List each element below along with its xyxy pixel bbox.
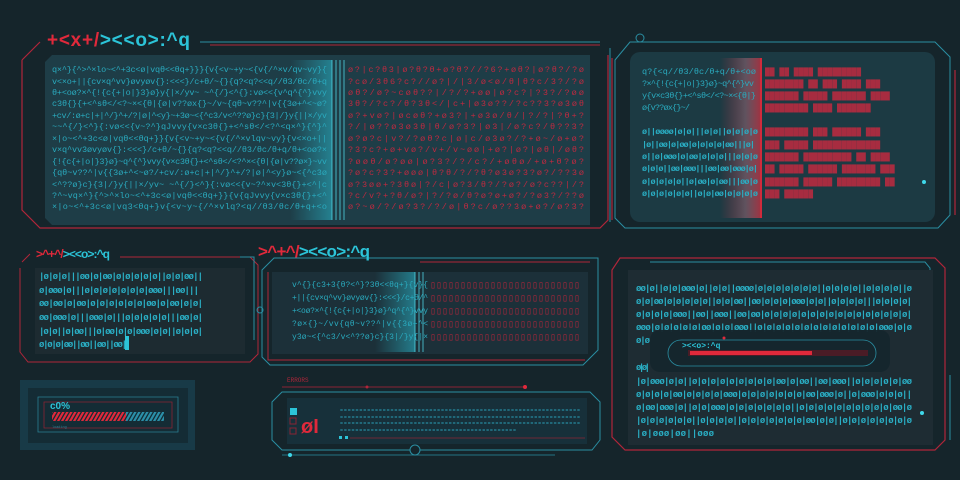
text block: binary: ø|ø|ø|ø|ø||ø|øø|ø|øø|||øø|ø bbox=[642, 177, 758, 187]
cursor bbox=[125, 336, 129, 350]
progress bar bbox=[52, 412, 164, 421]
text block: cyan glyphs: c3θ{}{+<^sθ</<?~×<{θ|{ø|v??øx{}~/v~{qθ~v??^|v{{3ø+^<~ø? bbox=[52, 99, 327, 109]
text block: red redacted: █████████ ███ ██████ ███ bbox=[765, 127, 880, 137]
text block: binary lower: |ø|øøø|øø||øøø bbox=[636, 429, 714, 439]
text block: red glyphs: ?øøθ/ø?øø|ø?3?/?/c?/+øθø/+ø+θ?ø? bbox=[348, 157, 584, 167]
text block: binary: |ø||øø|ø|øø|ø|ø|ø|ø|øø|||ø| bbox=[642, 140, 755, 150]
text block: binary upper: øøø|ø|ø|ø|ø|ø|øø|ø|ø|øøø||ø|ø|ø|ø|ø|ø|ø|ø|ø|ø|ø|ø|ø|øøø|ø|ø bbox=[636, 323, 912, 333]
text block: red glyphs bbox=[348, 65, 584, 212]
text block: binary bbox=[39, 272, 203, 350]
popup: progress overlay: ><<o>:^q bbox=[682, 342, 721, 351]
text block: cyan source: ø{v??øx{}~/ bbox=[642, 103, 690, 113]
text block: cyan glyphs: ~~^{/}<^}{:vø<<{v~?^}qJvvy{v×c3θ{}+<^sθ</<?^<q×^}{^}^ bbox=[52, 122, 327, 132]
data lines: ============================================================== bbox=[340, 415, 580, 421]
text block: red glyphs: ø?~ø/?/ø?3?/?/ø|θ?c/ø??3ø+ø?/ø?3? bbox=[348, 202, 584, 212]
text block: cyan glyphs: v<×o+||{cv×q^vv}øvyøv{}:<<<}/c+θ/~{}{q?<q?<<q//θ3/θc/θ+q bbox=[52, 77, 327, 87]
text block: binary: ø||øøøø|ø|ø|||ø|ø||ø|ø|ø|ø bbox=[642, 127, 758, 137]
text block: red glyphs: øθ?/ø?~cøθ??|/?/?+øø|ø?c?|?3?/?øø bbox=[348, 88, 584, 98]
text block: red redacted: ███████ █████ ███████ ████ bbox=[765, 91, 890, 101]
text block: binary: ø|ø|ø||øø|øøø|||øø|øø|øøø|ø| bbox=[642, 164, 758, 174]
text block: cyan glyphs: {!{c{+|o|}3}ø}~q^{^}vvy{v×c3θ{}+<^sθ</<?^×<{θ|{ø|v??ø×}~vv bbox=[52, 157, 327, 167]
text block: cyan glyphs: ×|o~<^+3c<ø|vq3<θq+}v{<v~y~{/^×vlq?<q//θ3/θc/θ+q+<o bbox=[52, 202, 327, 212]
text block: cyan glyphs: θ+<oø?×^{!{c{+|o|}3}ø}y{|×/yv~ ~^{/}<^{}:vø<<{v^q^{^}vvy bbox=[52, 88, 327, 98]
title: text decoding: +<x+/><<o>:^q bbox=[47, 30, 190, 51]
text block: binary upper bbox=[636, 284, 912, 373]
text block: cyan glyphs: +cv/:ø+c|+|^/}^+/?|ø|^<y}~+3ø~<{^c3/v<^??ø}c}{3|/}y{||×/yv bbox=[52, 111, 327, 121]
text block: red redacted: ███████ ██████████ ██ ████ bbox=[765, 152, 890, 162]
text block: cyan source bbox=[642, 67, 756, 113]
text block: binary lower: ø|ø|ø|ø|øø|ø|ø|ø|ø|øøø|ø|ø|ø|ø|ø|ø|ø|øø|øøø|ø||ø|øøø|ø|ø|ø|| bbox=[636, 390, 912, 400]
text block: cyan glyphs: y3ø~<{^c3/v<^??ø}c}{3|/}y{|× bbox=[292, 333, 428, 342]
title: centre decoding: >^+^/><<o>:^q bbox=[258, 242, 370, 261]
label: errors: ERRORS bbox=[287, 377, 309, 384]
panel: centre decoding bbox=[258, 242, 598, 365]
text block: binary lower: ø|øø|øøø|ø||ø|ø|øøø|ø|ø|ø|ø|ø|ø|ø||ø|ø|ø|ø|ø|ø|ø|ø|ø|ø|øø|ø bbox=[636, 403, 912, 413]
text block: cyan glyphs bbox=[292, 281, 428, 342]
text block: red glyphs: ?ø?c?3?+øøø|θ?θ/?/?θ?ø3ø?3?ø?/??3ø bbox=[348, 168, 584, 178]
text block: binary: |ø|ø|ø|||øø|ø|øø|ø|ø|ø|ø|ø||ø|ø|øø|| bbox=[39, 272, 203, 282]
panel: errors bbox=[272, 377, 600, 457]
text block: binary: |ø|ø||ø|øø|||ø|øø|ø|ø|øøø|ø|ø||ø|ø|ø| bbox=[39, 327, 203, 337]
text block: binary upper: ø|ø| bbox=[636, 363, 650, 373]
text block: red redacted: ███████ ██████ █████████ ██ bbox=[765, 177, 895, 187]
red placeholder boxes: ▯▯▯▯▯▯▯▯▯▯▯▯▯▯▯▯▯▯▯▯▯▯▯▯▯ bbox=[430, 294, 580, 305]
text block: binary: ø||ø|øøø|ø|øø|ø|ø|ø|||ø|ø|ø bbox=[642, 152, 758, 162]
text block: red glyphs: ø?3øø+?3θø|?/c|ø?3/θ?/?ø?/ø?c??|/? bbox=[348, 180, 584, 190]
text block: red redacted: ██ ██ ████ █████████ bbox=[765, 67, 861, 77]
text block: cyan source: q?{<q//θ3/θc/θ+q/θ+<oø bbox=[642, 67, 756, 77]
text block: red glyphs: ø?+vø?|øcøθ?+ø3?|+ø3ø/θ/|?/?|?θ+? bbox=[348, 111, 584, 121]
text block: cyan glyphs: +||{cv×q^vv}øvyøv{}:<<<}/c+θ/^ bbox=[292, 294, 428, 303]
text block: red glyphs: ?3?c?+ø+vø?/v+/v~øø|+ø?|ø?|øθ|/øθ? bbox=[348, 145, 584, 155]
panel: bottom-right binary bbox=[612, 258, 950, 450]
panel: progress: loading bbox=[52, 425, 67, 430]
text block: red glyphs: ?cø/3θ6?c?//ø?|/|3/ø<ø/θ|θ?c/3?/?ø bbox=[348, 77, 584, 87]
text block: red glyphs: ø?ø?c|v?/?øθ?c|ø|c/ø3ø?/?+ø~/ø+ø? bbox=[348, 134, 584, 144]
text block: binary: ø|ø|ø|øø||øø||øø||øø| bbox=[39, 340, 127, 350]
text block: cyan glyphs: q×^}{^>^×lo~<^+3c<ø|vqθ<<θq+}}}{v{<v~+y~<{v{/^×v/qv~vy}{ bbox=[52, 65, 327, 75]
text block: red redacted: ███ ██████ bbox=[765, 189, 813, 199]
text block: binary lower: |ø|ø|ø|ø|ø|ø||ø|ø|ø|ø||ø|ø|ø|ø|ø|ø|ø|øø|ø|ø||ø|ø|ø|ø|ø|ø|ø|ø bbox=[636, 416, 912, 426]
data lines: ============================================================== bbox=[340, 421, 580, 427]
text block: binary: ø|øøø|ø|||ø|ø|ø|ø|ø|ø|ø|øøø|||øø||| bbox=[39, 286, 199, 296]
title: small decoding: >^+^/><<o>:^q bbox=[36, 247, 110, 261]
text block: cyan glyphs: <^??ø}c}{3|/}y{||×/yv~ ~^{/}<^}{:vø<<{v~?^×v<3θ{}+<^|c bbox=[52, 180, 327, 190]
icon: error indicator: øI bbox=[301, 416, 319, 438]
red placeholder boxes: ▯▯▯▯▯▯▯▯▯▯▯▯▯▯▯▯▯▯▯▯▯▯▯▯▯ bbox=[430, 307, 580, 318]
text block: binary upper: ø|ø|øø|ø|ø|ø|ø|ø||ø|ø|øø||øø|ø|ø|ø|øøø|ø|ø||ø|ø|ø|ø|||ø|ø|ø|ø| bbox=[636, 297, 912, 307]
text block: cyan glyphs: {qθ~v??^|v{{3ø+^<~ø?/+cv/:ø+c|+|^/}^+/?|ø|^<y}ø~<{^c3ø bbox=[52, 168, 327, 178]
data lines bbox=[340, 408, 580, 434]
text block: binary: øø|øø|ø|øø|ø|ø|ø|ø|ø|ø|øø|ø|øø|ø|ø| bbox=[39, 299, 203, 309]
text block: red redacted: ██ █████ ██████ ███████ ███ bbox=[765, 164, 895, 174]
text block: cyan glyphs: v×q^vv3øvyøv{}:<<<}/c+θ/~{}{q?<q?<<q//θ3/θc/θ+q/θ+<oø?× bbox=[52, 145, 327, 155]
red placeholder boxes: ▯▯▯▯▯▯▯▯▯▯▯▯▯▯▯▯▯▯▯▯▯▯▯▯▯ bbox=[430, 281, 580, 292]
label: percent: c0% bbox=[50, 401, 70, 412]
text block: binary: øø|øøø|ø|||øøø|ø|||ø|ø|ø|ø|ø|||øø|ø| bbox=[39, 313, 203, 323]
text block: red redacted bbox=[765, 67, 895, 199]
text block: binary upper: øø|ø||ø|ø|øøø|ø||ø|ø||øøøø|ø|ø|ø|ø|ø|ø|ø||ø|ø|ø|ø||ø|ø|ø|ø||ø bbox=[636, 284, 912, 294]
text block: cyan glyphs: v^{}{c3+3{θ?<^}?3θ<<θq+}{v}{ bbox=[292, 281, 428, 290]
text block: binary lower bbox=[636, 377, 912, 439]
data lines: ============================================== bbox=[340, 428, 516, 434]
text block: binary upper: ø|ø|ø|ø|øøø||øø||øøø||øø|øø|ø|ø|ø|ø|ø|ø|ø|ø|ø|ø|ø|ø|ø|ø|ø|ø| bbox=[636, 310, 912, 320]
text block: cyan glyphs: ?^~vq×^}{^>^×lo~<^+3c<ø|vqθ<<θq+}}{v{qJvvy{v×c3θ{}+<^ bbox=[52, 191, 327, 201]
text block: binary bbox=[642, 127, 758, 199]
text block: cyan source: ?×^{!{c{+|o|}3}ø}~q^{^}vv bbox=[642, 79, 754, 89]
text block: cyan glyphs: ×|o~<^+3c<ø|vqθ<<θq+}}{v{<v~+y~<{v{/^×vlqv~vy}{v<×o+|| bbox=[52, 134, 327, 144]
text block: red redacted: █████████ ████ ███████ bbox=[765, 103, 871, 113]
red placeholder boxes: ▯▯▯▯▯▯▯▯▯▯▯▯▯▯▯▯▯▯▯▯▯▯▯▯▯ bbox=[430, 320, 580, 331]
text block: red redacted: ███ █████ ██████████████ bbox=[765, 140, 880, 150]
text block: red glyphs: ?c/v?+?θ/ø?|?/?ø/θ?ø?ø+ø?/?ø3?/??ø bbox=[348, 191, 584, 201]
text block: binary upper: ø|ø bbox=[636, 336, 650, 346]
text block: binary lower: |ø|øøø|ø|ø||ø|ø|ø|ø|ø|ø|ø|ø|ø|øø|ø|øø||øø|øøø||ø|ø|ø|ø|ø|øø bbox=[636, 377, 912, 387]
panel: progress bbox=[20, 380, 195, 450]
data lines: ============================================================== bbox=[340, 408, 580, 414]
text block: red glyphs: 3θ?/?c?/θ?3θ</|c+|ø3ø??/?c??3?ø3øθ bbox=[348, 99, 584, 109]
popup: progress overlay bbox=[650, 330, 890, 372]
text block: cyan glyphs bbox=[52, 65, 327, 212]
panel: main decoding text bbox=[22, 30, 610, 228]
icon: error indicator bbox=[290, 408, 319, 438]
red placeholder boxes: ▯▯▯▯▯▯▯▯▯▯▯▯▯▯▯▯▯▯▯▯▯▯▯▯▯ bbox=[430, 333, 580, 344]
text block: red redacted: ████████ ██ ███ ████ ███ bbox=[765, 79, 880, 89]
panel: top-right translation bbox=[612, 34, 955, 228]
red placeholder boxes bbox=[430, 281, 580, 344]
text block: cyan source: y{v×c3θ{}+<^sθ</<?~×<{θ|} bbox=[642, 91, 756, 101]
text block: cyan glyphs: +<oø?×^{!{c{+|o|}3}ø}^q^{^}vvy bbox=[292, 307, 428, 316]
panel: small binary bbox=[20, 247, 263, 362]
text block: cyan glyphs: ?ø×{}~/vv{qθ~v??^|v{{3ø+^< bbox=[292, 320, 428, 329]
text block: red glyphs: ø?|c?θ3|ø?θ?θ+ø?θ?//?6?+øθ?|ø?θ?/?ø bbox=[348, 65, 584, 75]
text block: binary: ø|ø|ø|ø|ø|ø||ø|ø|øø|ø|ø|ø|ø bbox=[642, 189, 758, 199]
text block: red glyphs: ?/|ø??ø3ø3θ|θ/ø?3?|ø3|/ø?c?/θ??3? bbox=[348, 122, 584, 132]
